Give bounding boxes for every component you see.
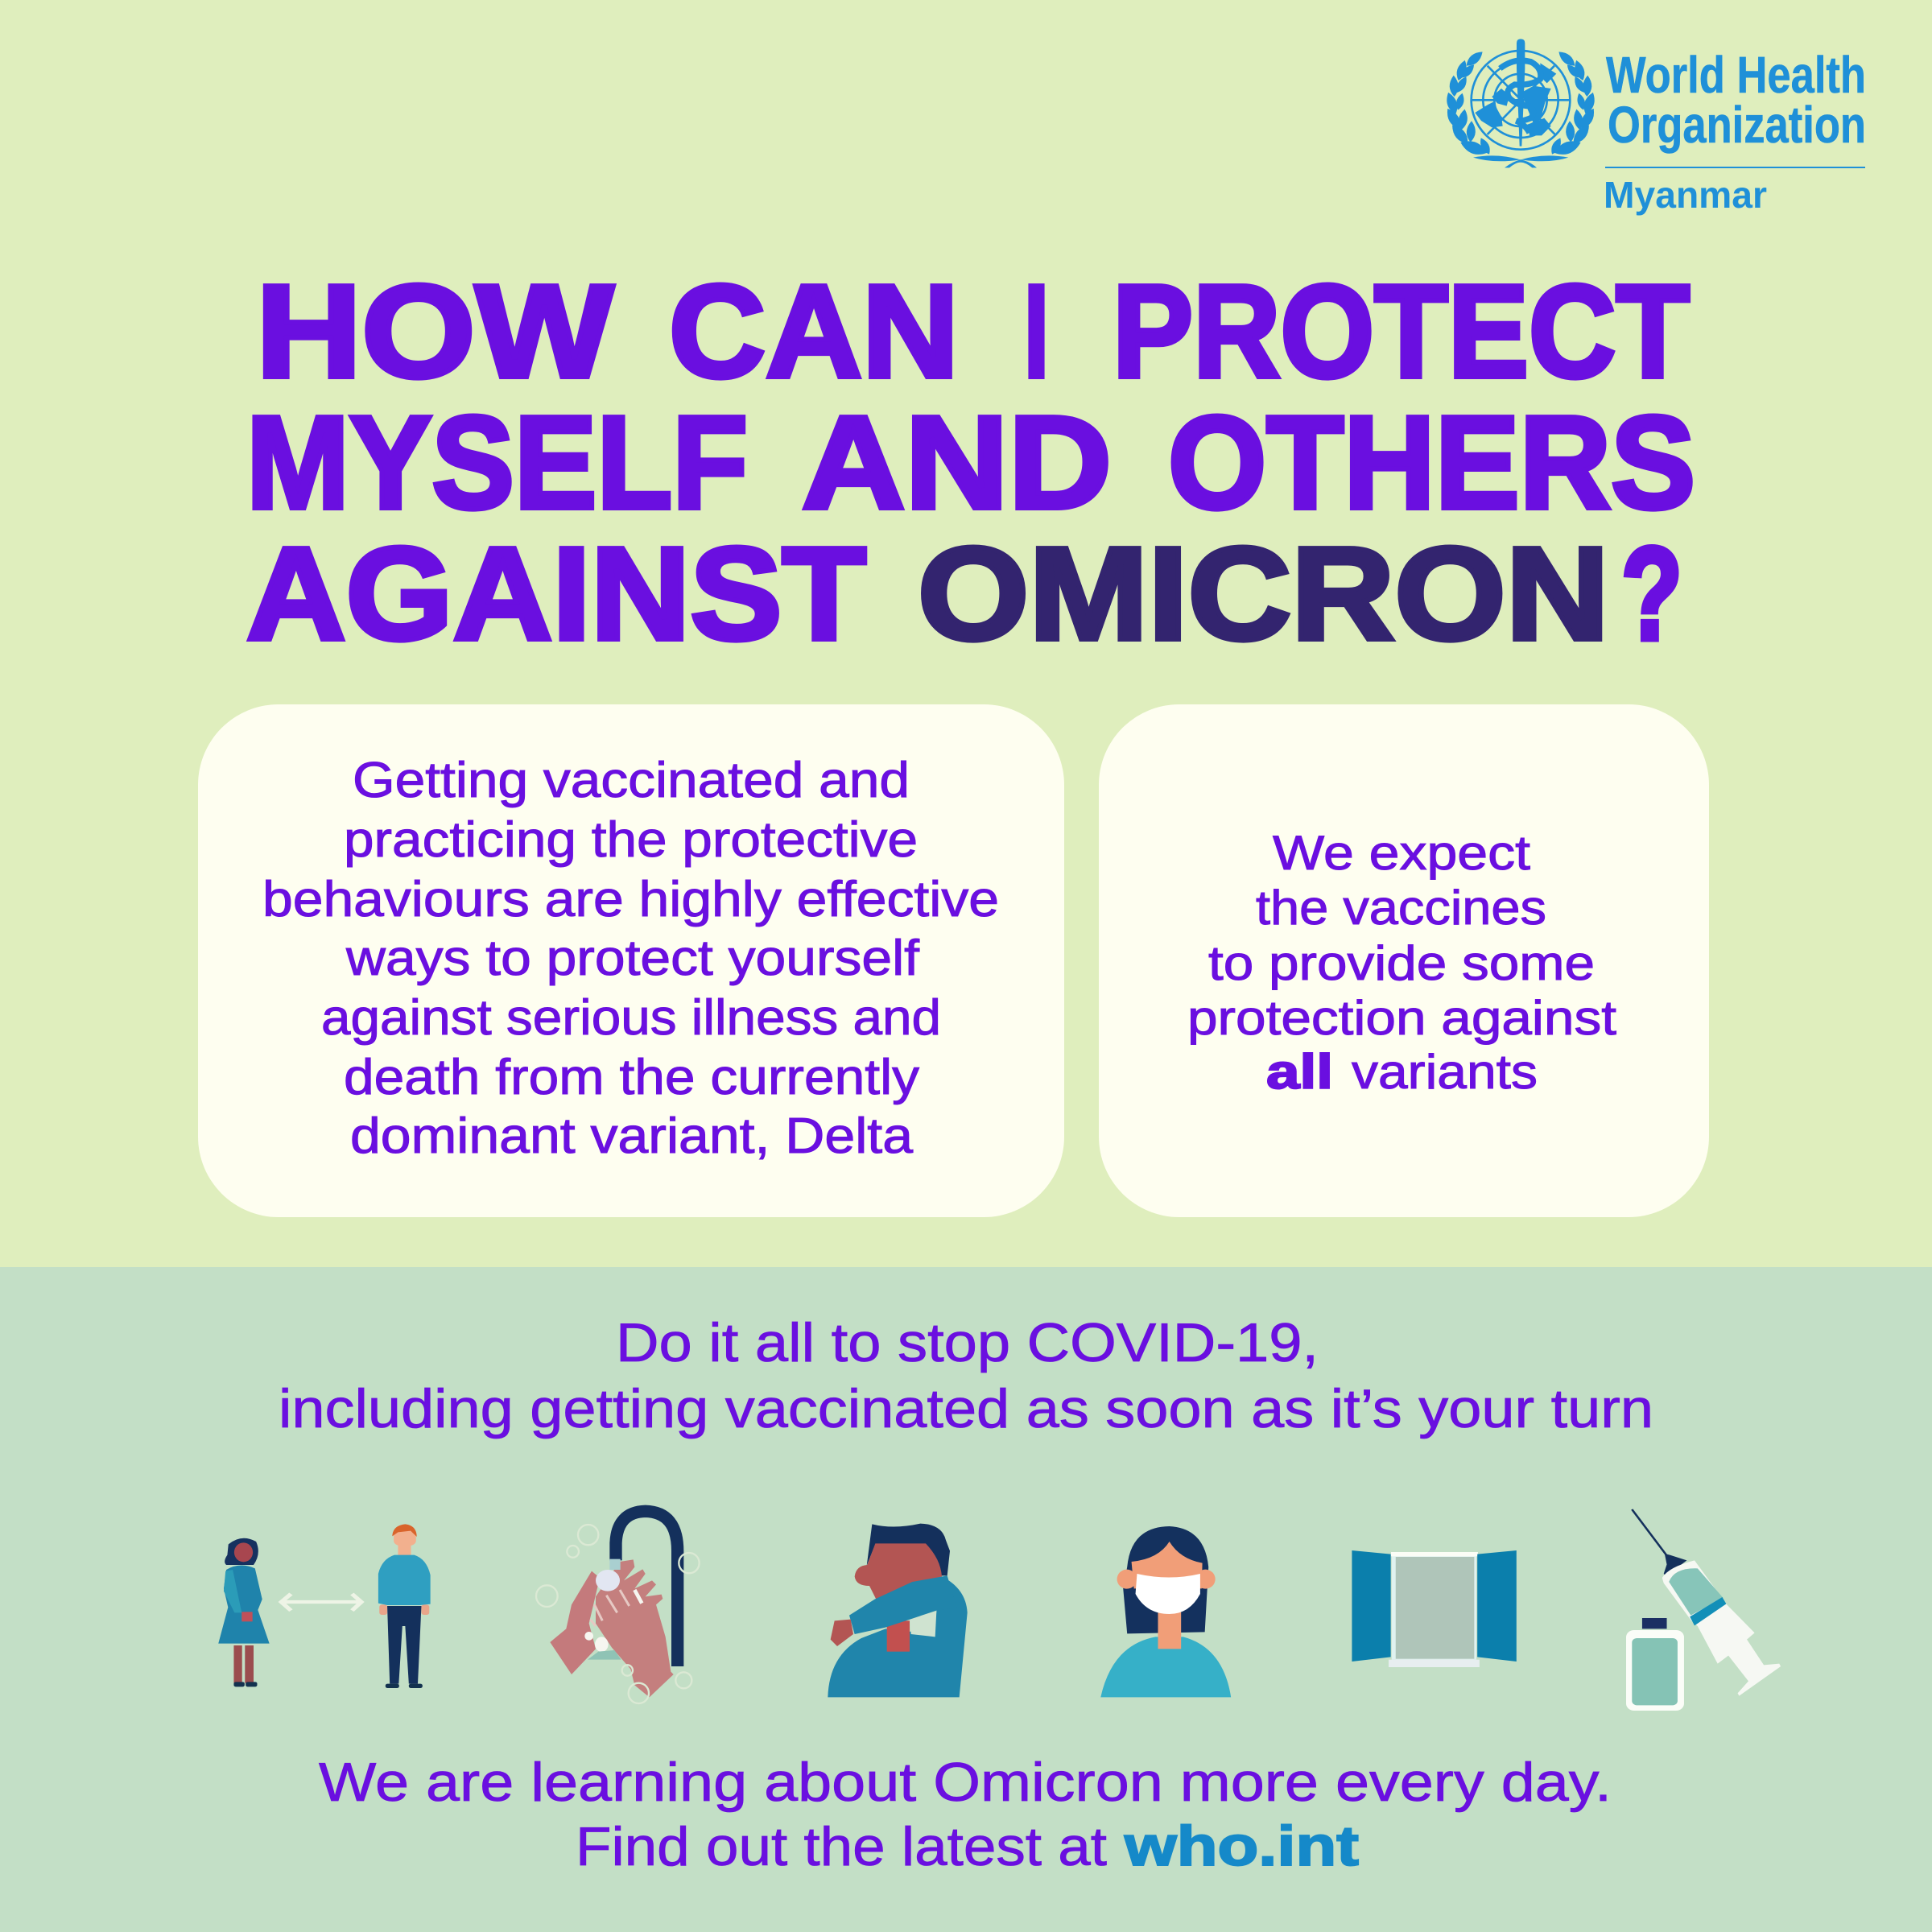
card text: practicing the protective [344, 812, 918, 868]
ears [1117, 1570, 1137, 1589]
icon: WHO emblem [1443, 39, 1598, 167]
laurel left [1443, 48, 1492, 159]
card text: death from the currently [344, 1050, 919, 1105]
left shutter [1352, 1550, 1391, 1662]
footer message: who.int [1124, 1814, 1359, 1877]
title: OTHERS [1168, 389, 1695, 536]
title: CAN [669, 258, 959, 405]
title: I [1024, 258, 1049, 405]
card text: We expect [1273, 826, 1530, 880]
man [378, 1524, 431, 1688]
icon: wearing a mask [1100, 1526, 1231, 1697]
call to action: including getting vaccinated as soon as it’s your turn [279, 1378, 1653, 1439]
card text: to provide some [1208, 936, 1595, 990]
neck [887, 1620, 910, 1652]
card text: against serious illness and [321, 990, 941, 1046]
icon: hand washing [536, 1511, 700, 1703]
panel: vaccines and variants [1099, 704, 1709, 1217]
title [246, 258, 1695, 667]
right shutter [1477, 1550, 1517, 1662]
hub [1664, 1554, 1686, 1576]
ribbon [1473, 155, 1568, 167]
soap and water [584, 1559, 642, 1660]
panel: vaccination and protective behaviours [198, 704, 1064, 1217]
face [1132, 1542, 1203, 1588]
title: OMICRON [918, 520, 1609, 667]
woman [218, 1538, 270, 1686]
title: ? [1621, 520, 1682, 667]
top frame [1391, 1552, 1478, 1556]
icon: physical distancing [218, 1524, 431, 1688]
title: HOW [256, 258, 613, 405]
title: PROTECT [1113, 258, 1690, 405]
vial [1626, 1618, 1684, 1711]
call to action [279, 1312, 1653, 1439]
mask [1136, 1574, 1200, 1614]
footer message: Find out the latest at [576, 1816, 1107, 1877]
card text: ways to protect yourself [345, 931, 920, 986]
barrel band [1690, 1597, 1726, 1625]
hand [831, 1620, 853, 1646]
bubbles [536, 1525, 700, 1703]
window pane [1392, 1554, 1476, 1660]
hair [1123, 1526, 1208, 1633]
serpent [1500, 60, 1541, 133]
continents [1475, 102, 1503, 127]
front hand [596, 1559, 674, 1697]
staff [1517, 39, 1525, 147]
neck [1158, 1612, 1181, 1649]
sill [1389, 1660, 1480, 1667]
faucet [616, 1511, 678, 1666]
back hand [550, 1571, 600, 1674]
head [855, 1543, 942, 1600]
footer message: We are learning about Omicron more every day. [319, 1752, 1612, 1813]
gap under arm [910, 1612, 936, 1637]
plunger and barrel [1662, 1560, 1781, 1696]
hair [867, 1524, 950, 1575]
needle [1632, 1509, 1668, 1558]
card text [1187, 826, 1616, 1099]
panel: upper background [0, 0, 1932, 1267]
card text [262, 753, 999, 1164]
card text: variants [1352, 1045, 1538, 1099]
globe grid [1472, 51, 1570, 150]
title: AND [802, 389, 1112, 536]
icon: vaccine syringe and vial [1626, 1509, 1781, 1711]
call to action: Do it all to stop COVID-19, [616, 1312, 1319, 1373]
icon: open window [1352, 1550, 1517, 1667]
card text: Getting vaccinated and [353, 753, 910, 808]
logo wordmark: Myanmar [1604, 174, 1767, 216]
vaccine liquid [1669, 1568, 1724, 1616]
logo wordmark [1604, 46, 1866, 216]
logo wordmark: Organization [1608, 96, 1866, 154]
body [828, 1576, 968, 1697]
shoulders [1100, 1637, 1231, 1697]
logo wordmark: World Health [1606, 46, 1866, 104]
card text: protection against [1187, 991, 1616, 1045]
title: AGAINST [246, 520, 866, 667]
card background [198, 704, 1064, 1217]
laurel right [1549, 48, 1598, 159]
card text: all [1266, 1045, 1333, 1099]
icon: cover your cough [828, 1524, 968, 1697]
arrow: distance [281, 1594, 361, 1611]
card text: behaviours are highly effective [262, 872, 999, 927]
card text: dominant variant, Delta [350, 1108, 914, 1164]
footer message [319, 1752, 1612, 1877]
panel: lower background [0, 1267, 1932, 1932]
card text: the vaccines [1256, 881, 1546, 935]
title: MYSELF [246, 389, 748, 536]
arm [849, 1575, 956, 1634]
card background [1099, 704, 1709, 1217]
